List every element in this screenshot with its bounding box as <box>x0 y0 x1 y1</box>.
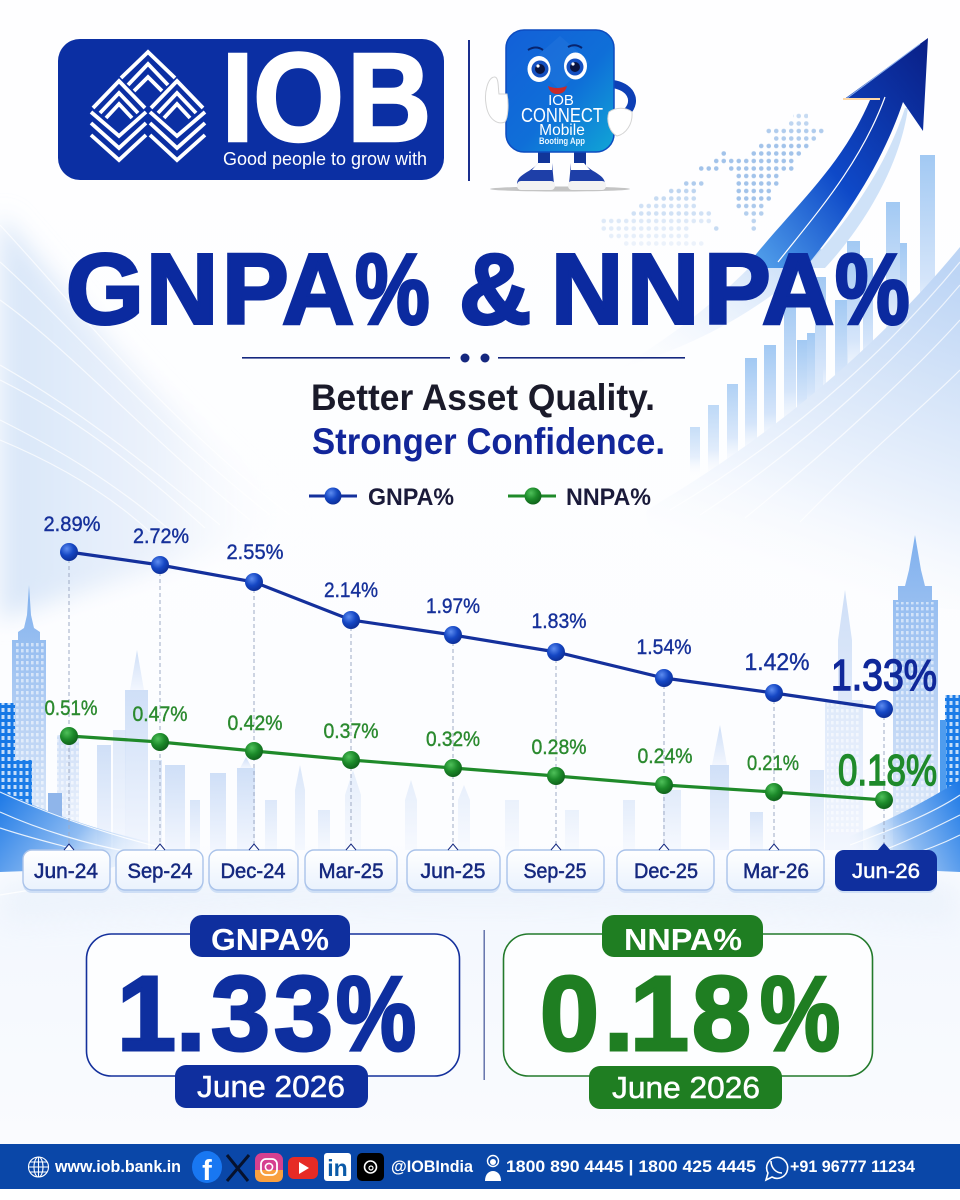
icon: instagram <box>255 1153 283 1182</box>
NNPA value: 0.18 <box>540 955 751 1073</box>
helpline numbers: 1800 890 4445 | 1800 425 4445 <box>506 1157 756 1176</box>
GNPA values: 1.33% <box>831 651 937 700</box>
drop lines <box>69 552 884 845</box>
NNPA date pill: June 2026 <box>612 1070 760 1105</box>
NNPA values: 0.24% <box>638 745 692 768</box>
mascot tile text: CONNECT <box>521 105 603 127</box>
chart: GNPA and NNPA trend <box>44 513 937 845</box>
mascot tile text: Mobile <box>539 122 585 139</box>
icon: whatsapp <box>766 1157 788 1180</box>
whatsapp number: +91 96777 11234 <box>790 1157 916 1176</box>
website: www.iob.bank.in <box>54 1157 181 1176</box>
bars: growth chart <box>690 155 935 480</box>
icon: X <box>227 1155 249 1181</box>
GNPA values <box>44 513 937 700</box>
icon: globe <box>28 1157 48 1177</box>
date axis pills: Sep-25 <box>524 860 586 883</box>
NNPA pill <box>602 915 763 957</box>
GNPA pill <box>190 915 350 957</box>
divider: cards <box>484 930 485 1080</box>
card: GNPA <box>86 915 460 1108</box>
date axis pills: Mar-25 <box>318 860 384 883</box>
NNPA values: 0.32% <box>426 728 480 751</box>
right sweep <box>646 247 960 610</box>
date axis pills: Jun-25 <box>420 860 486 883</box>
NNPA date pill <box>589 1066 782 1109</box>
NNPA line <box>69 736 884 800</box>
subtitle: Better Asset Quality. <box>311 377 655 418</box>
NNPA values: 0.42% <box>228 712 282 735</box>
legend: GNPA% <box>368 484 454 511</box>
GNPA pill: GNPA% <box>211 922 329 957</box>
date axis pills: Jun-26 <box>852 860 920 883</box>
GNPA values: 2.89% <box>44 513 100 536</box>
GNPA date pill: June 2026 <box>197 1069 345 1104</box>
NNPA values: 0.37% <box>324 720 378 743</box>
tagline: Good people to grow with <box>223 148 427 169</box>
icon: threads <box>357 1153 384 1181</box>
icon: mascot IOB Connect <box>485 30 632 192</box>
NNPA pill: NNPA% <box>624 922 742 957</box>
card: NNPA <box>504 915 872 1109</box>
icon: facebook <box>192 1151 222 1187</box>
title: % <box>835 233 910 345</box>
date axis pills: Dec-25 <box>634 860 698 883</box>
icon: youtube <box>288 1157 318 1179</box>
footer band <box>0 1144 960 1200</box>
icon: linkedin: in <box>327 1155 348 1181</box>
date axis pills: Jun-24 <box>34 860 98 883</box>
GNPA values: 2.55% <box>226 541 284 564</box>
subtitle: Stronger Confidence. <box>312 421 665 462</box>
NNPA values: 0.47% <box>132 703 188 726</box>
mascot tile text <box>521 92 603 146</box>
GNPA values: 1.42% <box>744 649 810 676</box>
logo panel: IOB <box>58 27 444 180</box>
title divider <box>242 354 685 362</box>
title <box>66 233 910 346</box>
skyline: right towers <box>825 535 960 872</box>
NNPA markers <box>60 727 893 809</box>
legend: NNPA% <box>566 484 651 511</box>
mascot tile text: Booting App <box>539 136 585 146</box>
date axis pills: Sep-24 <box>128 860 193 883</box>
title: NNPA <box>551 234 834 346</box>
icon: IOB emblem <box>91 52 205 160</box>
brand name: IOB <box>221 27 432 168</box>
mascot tile text: IOB <box>548 92 574 109</box>
icon: facebook: f <box>202 1155 212 1187</box>
NNPA values: 0.18% <box>838 746 937 795</box>
GNPA values: 1.97% <box>426 595 480 618</box>
NNPA values: 0.28% <box>532 736 586 759</box>
GNPA value: 1.33 <box>117 955 333 1073</box>
social handle: @IOBIndia <box>391 1157 474 1176</box>
title: & <box>459 234 531 346</box>
arrow: rising trend <box>620 38 928 368</box>
GNPA value: % <box>336 954 416 1073</box>
NNPA values <box>44 697 937 795</box>
GNPA values: 2.72% <box>133 525 189 548</box>
GNPA markers <box>60 543 893 718</box>
GNPA values: 2.14% <box>324 579 378 602</box>
GNPA date pill <box>175 1065 368 1108</box>
GNPA line <box>69 552 884 709</box>
date axis pills: Dec-24 <box>220 860 286 883</box>
dotted world map <box>600 112 825 247</box>
title: % <box>355 233 430 345</box>
subtitle <box>311 377 665 462</box>
GNPA values: 1.54% <box>636 636 692 659</box>
NNPA values: 0.21% <box>747 752 799 775</box>
date axis pills <box>23 843 937 893</box>
NNPA value: % <box>760 954 840 1073</box>
divider: logo and mascot <box>468 40 470 181</box>
NNPA values: 0.51% <box>44 697 98 720</box>
skyline: left towers <box>0 585 180 895</box>
GNPA values: 1.83% <box>532 610 586 633</box>
icon: support person <box>485 1156 501 1181</box>
legend <box>309 484 651 511</box>
date axis pills: Mar-26 <box>743 860 809 883</box>
NNPA value <box>540 954 840 1073</box>
title: GNPA <box>66 234 354 346</box>
skyline: faint middle <box>97 650 824 850</box>
